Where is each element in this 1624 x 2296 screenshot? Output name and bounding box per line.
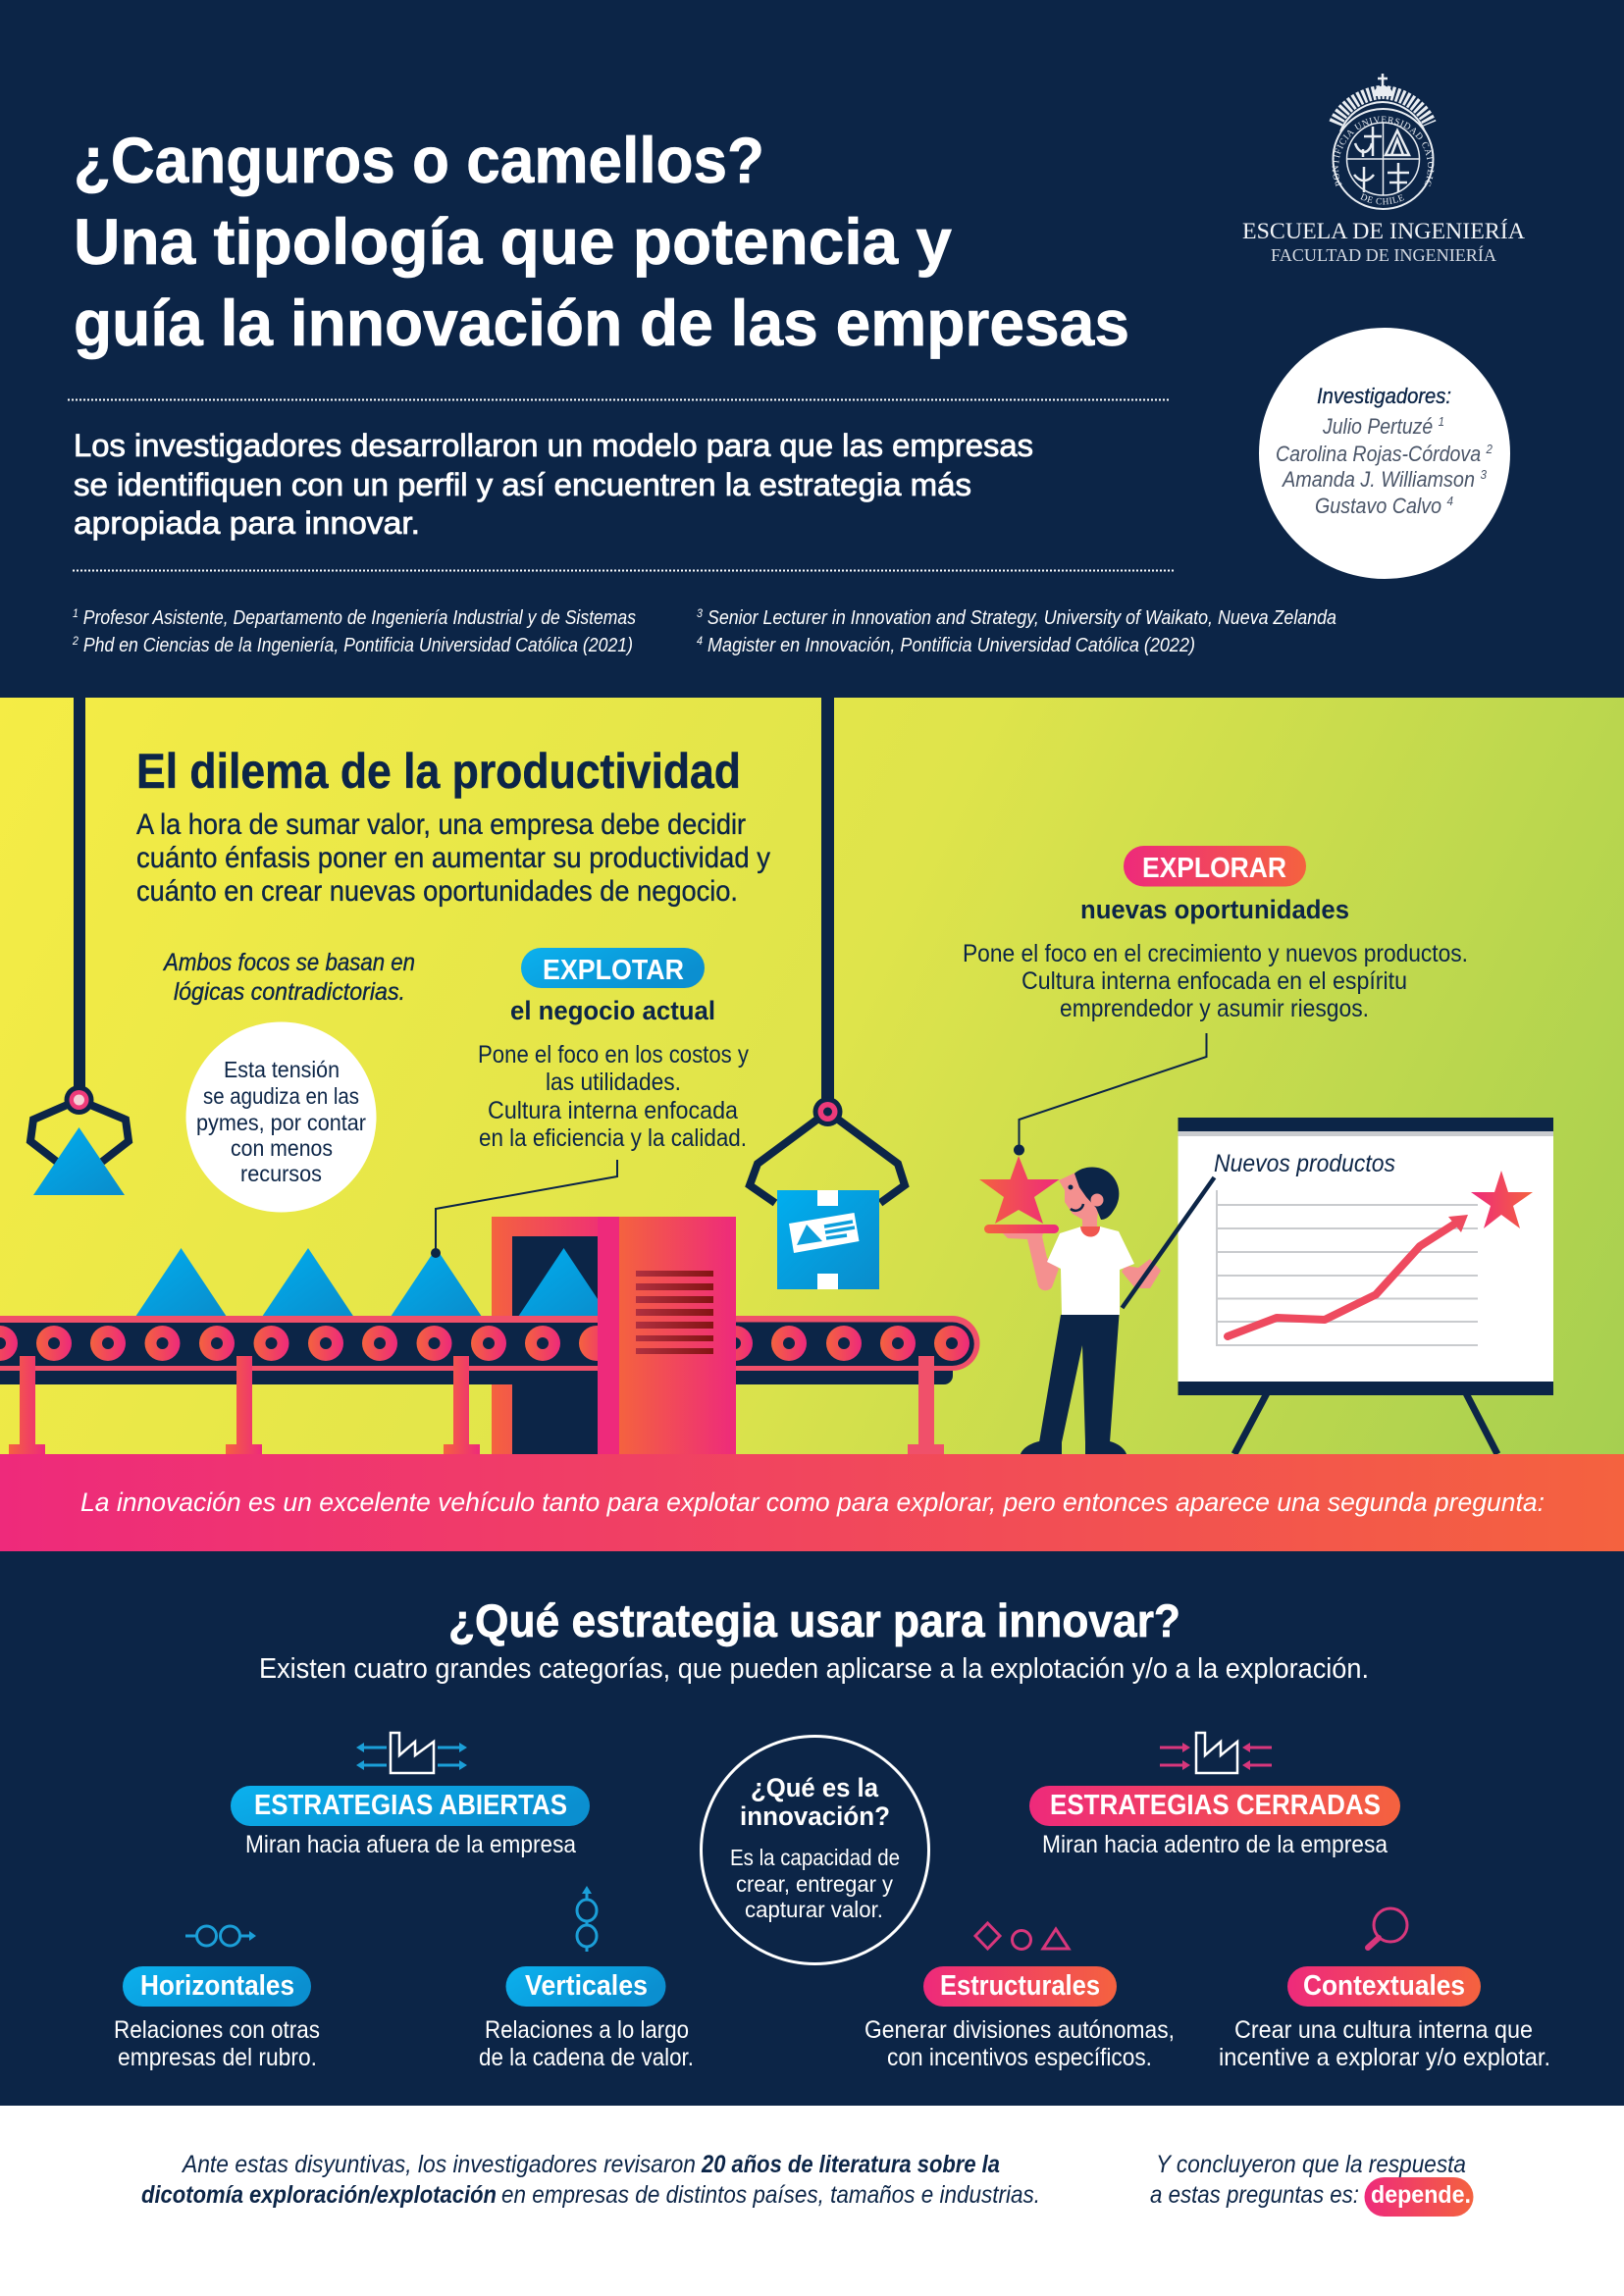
text: verticales — [479, 2016, 694, 2071]
bottom conclusion panel — [0, 2106, 1624, 2296]
researchers circle: 4 — [1447, 494, 1453, 508]
pill: estrategias abiertas: ESTRATEGIAS ABIERTAS — [254, 1790, 567, 1821]
center circle: qué es la innovación: innovación? — [740, 1801, 890, 1831]
footnotes: 2 — [72, 634, 79, 648]
title: Una tipología que potencia y — [74, 205, 952, 278]
researchers circle: Amanda J. Williamson — [1283, 467, 1495, 492]
explorar block — [963, 846, 1468, 1022]
text: abiertas: Miran hacia afuera de la empresa — [245, 1831, 576, 1858]
researchers circle: 3 — [1480, 467, 1488, 482]
explotar block: el negocio actual — [510, 996, 715, 1025]
productivity panel background — [0, 698, 1624, 1454]
text: cerradas: Miran hacia adentro de la empresa — [1042, 1831, 1388, 1858]
presentation board chart — [1178, 1118, 1553, 1454]
ribbon message: La innovación es un excelente vehículo tanto para explotar como para explorar, pero entonces aparece una segunda pregunta: — [80, 1487, 1545, 1517]
text: contextuales: Crear una cultura interna que — [1234, 2016, 1533, 2044]
text: literatura: dicotomía exploración/explotación — [141, 2181, 497, 2209]
machine right block — [598, 1217, 736, 1454]
footnotes: 4 — [697, 634, 703, 648]
text: conclusión depende: a estas preguntas es: — [1150, 2181, 1359, 2209]
text: conclusión depende — [1150, 2151, 1474, 2217]
text: estructurales: Generar divisiones autónomas, — [864, 2016, 1175, 2044]
footnotes: Senior Lecturer in Innovation and Strategy, University of Waikato, Nueva Zelanda — [703, 607, 1336, 629]
pill: verticales — [506, 1966, 665, 2007]
intro text: dilema: A la hora de sumar valor, una empresa debe decidir — [136, 809, 746, 841]
researchers circle: Investigadores: — [1317, 384, 1451, 408]
pill: estrategias cerradas: ESTRATEGIAS CERRADAS — [1050, 1790, 1381, 1821]
intro paragraph: Los investigadores desarrollaron un modelo para que las empresas — [74, 428, 1033, 463]
logo: Escuela de Ingeniería — [1242, 74, 1525, 265]
top header panel — [68, 74, 1525, 656]
product triangles on belt — [135, 1248, 482, 1317]
intro paragraph — [74, 428, 1033, 541]
presentation board chart: Nuevos productos — [1214, 1150, 1395, 1177]
heading: estrategia: ¿Qué estrategia usar para innovar? — [448, 1594, 1180, 1646]
center circle: qué es la innovación: crear, entregar y — [736, 1871, 893, 1897]
explotar block: en la eficiencia y la calidad. — [479, 1124, 747, 1152]
explorar block: EXPLORAR — [1142, 853, 1286, 884]
explotar block: las utilidades. — [546, 1069, 681, 1096]
conveyor belt left — [0, 1316, 614, 1454]
center circle: qué es la innovación: capturar valor. — [745, 1897, 883, 1922]
researchers circle: 2 — [1486, 442, 1493, 456]
person with star — [979, 1156, 1215, 1454]
hanging claw left — [30, 698, 129, 1195]
pill: contextuales: Contextuales — [1303, 1970, 1465, 2002]
footnotes: Profesor Asistente, Departamento de Ingeniería Industrial y de Sistemas — [79, 607, 636, 629]
pill: horizontales: Horizontales — [140, 1970, 294, 2002]
text: contextuales — [1219, 2016, 1550, 2071]
researchers circle — [1259, 328, 1510, 579]
intro paragraph: se identifiquen con un perfil y así encuentren la estrategia más — [74, 467, 971, 502]
hanging claw center with box — [750, 698, 905, 1289]
footnotes: Magister en Innovación, Pontificia Universidad Católica (2022) — [703, 635, 1195, 656]
footnotes: Phd en Ciencias de la Ingeniería, Pontificia Universidad Católica (2021) — [79, 635, 633, 656]
center circle: qué es la innovación: ¿Qué es la — [751, 1773, 879, 1802]
white circle: tensión: recursos — [240, 1161, 322, 1186]
intro text: dilema — [136, 809, 770, 908]
pill: verticales: Verticales — [525, 1970, 648, 2002]
conveyor belt right — [717, 1316, 980, 1454]
text: horizontales: empresas del rubro. — [118, 2044, 317, 2071]
footnotes: 3 — [697, 606, 703, 620]
text: literatura: Ante estas disyuntivas, los investigadores revisaron — [181, 2151, 696, 2178]
title: guía la innovación de las empresas — [74, 287, 1129, 359]
subtitle: categorías: Existen cuatro grandes categorías, que pueden aplicarse a la explotación y/o a la exploración. — [259, 1653, 1369, 1685]
white circle: tensión: se agudiza en las — [203, 1083, 359, 1109]
heading: dilema: El dilema de la productividad — [136, 744, 741, 799]
icon: contextuales — [1368, 1908, 1407, 1948]
icon: open factory — [356, 1733, 467, 1773]
explotar block: Pone el foco en los costos y — [478, 1041, 749, 1069]
ribbon message — [0, 1454, 1624, 1551]
text: estructurales: con incentivos específicos. — [887, 2044, 1152, 2071]
explotar block: Cultura interna enfocada — [488, 1097, 738, 1124]
callout line: explotar — [431, 1160, 617, 1258]
logo: Escuela de Ingeniería: FACULTAD DE INGENIERÍA — [1271, 244, 1496, 265]
researchers circle: 1 — [1439, 414, 1444, 429]
logo: Escuela de Ingeniería: DE CHILE — [1360, 193, 1404, 204]
note: lógicas contradictorias — [162, 949, 415, 1006]
center circle: qué es la innovación: Es la capacidad de — [730, 1845, 900, 1870]
explorar block: Cultura interna enfocada en el espíritu — [1022, 967, 1407, 995]
text: literatura: en empresas de distintos países, tamaños e industrias. — [501, 2181, 1040, 2209]
white circle: tensión — [186, 1022, 377, 1213]
text: literatura — [141, 2151, 1040, 2209]
footnotes: 1 — [73, 606, 79, 620]
researchers circle: Carolina Rojas-Córdova — [1276, 442, 1506, 466]
logo: Escuela de Ingeniería: ESCUELA DE INGENIERÍA — [1242, 219, 1525, 243]
text: conclusión depende: depende. — [1371, 2181, 1471, 2209]
callout line: explorar — [1014, 1033, 1207, 1156]
white circle: tensión: Esta tensión — [224, 1057, 340, 1082]
note: lógicas contradictorias: lógicas contradictorias. — [174, 978, 405, 1006]
pill: estructurales: Estructurales — [940, 1970, 1100, 2002]
title — [74, 124, 1129, 359]
explorar block: emprendedor y asumir riesgos. — [1060, 995, 1369, 1022]
pill: estructurales — [923, 1966, 1117, 2007]
explorar block: Pone el foco en el crecimiento y nuevos productos. — [963, 940, 1468, 967]
intro paragraph: apropiada para innovar. — [74, 505, 420, 541]
text: verticales: de la cadena de valor. — [479, 2044, 694, 2071]
text: horizontales — [114, 2016, 320, 2071]
explotar block: EXPLOTAR — [543, 955, 684, 986]
intro text: dilema: cuánto énfasis poner en aumentar su productividad y — [136, 842, 770, 874]
machine left frame — [492, 1217, 598, 1454]
icon: closed factory — [1160, 1733, 1272, 1773]
white circle: tensión: pymes, por contar — [196, 1110, 366, 1135]
researchers circle: Julio Pertuzé — [1323, 414, 1447, 439]
intro text: dilema: cuánto en crear nuevas oportunidades de negocio. — [136, 875, 738, 908]
note: lógicas contradictorias: Ambos focos se basan en — [162, 949, 415, 976]
explorar block: nuevas oportunidades — [1080, 895, 1349, 924]
icon: horizontales — [185, 1926, 256, 1946]
text: conclusión depende: Y concluyeron que la respuesta — [1156, 2151, 1466, 2178]
text: contextuales: incentive a explorar y/o explotar. — [1219, 2044, 1550, 2071]
text: literatura: 20 años de literatura sobre la — [701, 2151, 1000, 2178]
title: ¿Canguros o camellos? — [74, 124, 764, 196]
text: estructurales — [864, 2016, 1175, 2071]
footnotes — [72, 606, 1336, 656]
text: horizontales: Relaciones con otras — [114, 2016, 320, 2044]
explotar block — [478, 948, 749, 1152]
text: verticales: Relaciones a lo largo — [485, 2016, 689, 2044]
researchers circle: Gustavo Calvo — [1315, 494, 1456, 518]
icon: verticales — [577, 1886, 597, 1952]
icon: estructurales — [975, 1923, 1069, 1949]
strategies panel — [0, 1551, 1624, 2106]
white circle: tensión: con menos — [231, 1135, 333, 1161]
center circle: qué es la innovación — [701, 1737, 928, 1964]
